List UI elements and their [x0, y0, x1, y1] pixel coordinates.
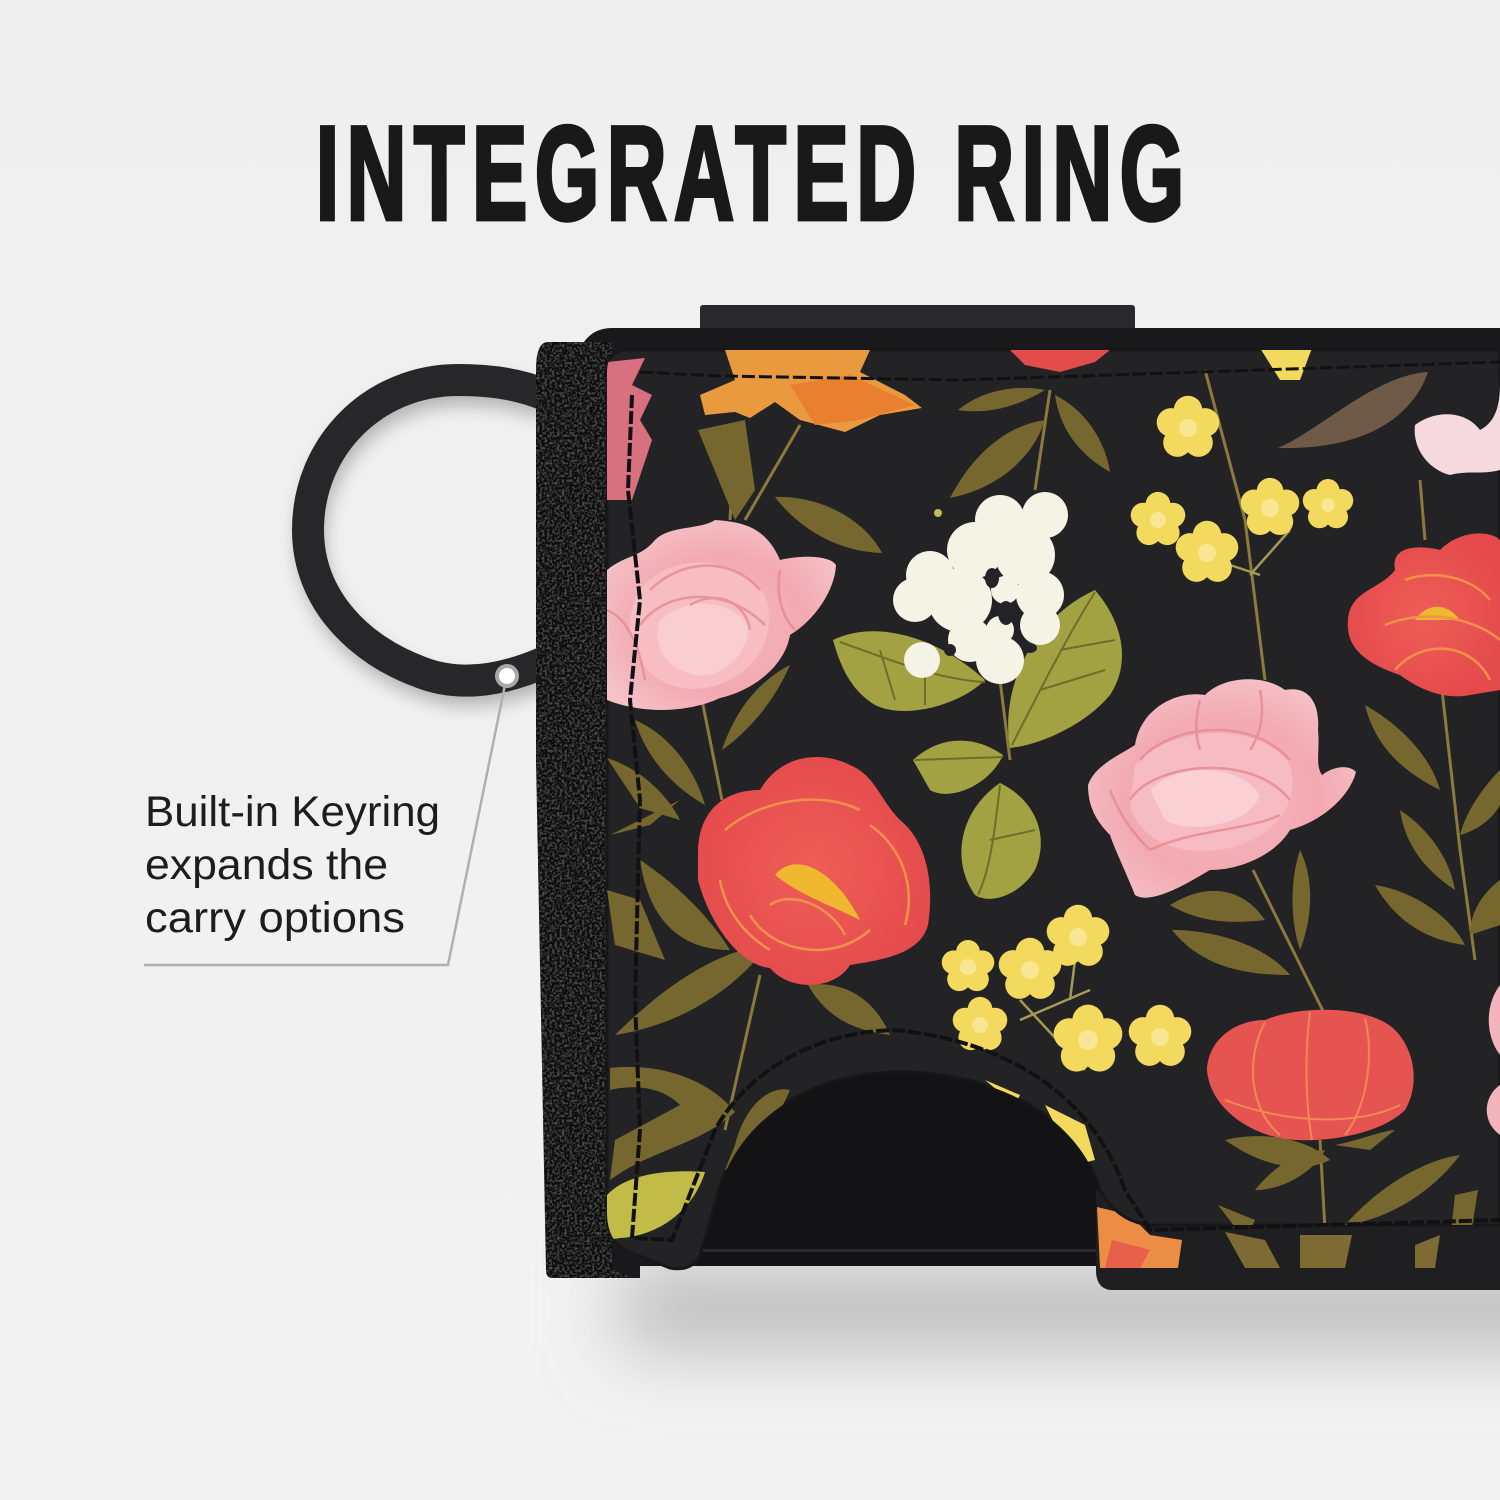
pink peony left: [607, 520, 836, 710]
red flower bottom: [1207, 1010, 1414, 1140]
top orange flower: [700, 350, 922, 432]
callout leader line: [144, 680, 506, 965]
top red flower: [1010, 350, 1110, 372]
title: INTEGRATED RING: [316, 100, 1184, 248]
brown leaves: [607, 388, 1500, 1240]
red poppy left: [698, 757, 930, 985]
yellow flowers: [942, 348, 1353, 1165]
pink peony center: [1088, 679, 1356, 898]
notch plate: [690, 1060, 1110, 1266]
keyring: [308, 380, 548, 692]
wallet: [536, 305, 1500, 1290]
callout dot: [497, 666, 517, 686]
callout text: expands the: [145, 841, 388, 889]
red flower right: [1348, 533, 1500, 696]
stems: [700, 370, 1475, 1230]
back plate: [560, 328, 1500, 1278]
metal clip top: [700, 305, 1135, 335]
stitching: [628, 395, 1500, 1240]
callout text: Built-in Keyring: [145, 788, 440, 836]
callout text: [145, 788, 440, 942]
white cluster: [893, 492, 1068, 684]
wallet drop shadow: [620, 1265, 1500, 1350]
floral print: [607, 348, 1500, 1240]
lower left olive leaf: [607, 1171, 705, 1240]
corner pink bloom: [607, 358, 652, 500]
callout text: carry options: [145, 894, 405, 942]
olive leaves: [833, 590, 1122, 899]
lower right flap: [1096, 1190, 1500, 1290]
leather panel: [607, 350, 1500, 1269]
flap flowers: [1097, 1207, 1182, 1268]
elastic band: [536, 342, 632, 1278]
pink petal edge right: [1487, 985, 1500, 1135]
pale pink flower top right: [1415, 380, 1500, 475]
